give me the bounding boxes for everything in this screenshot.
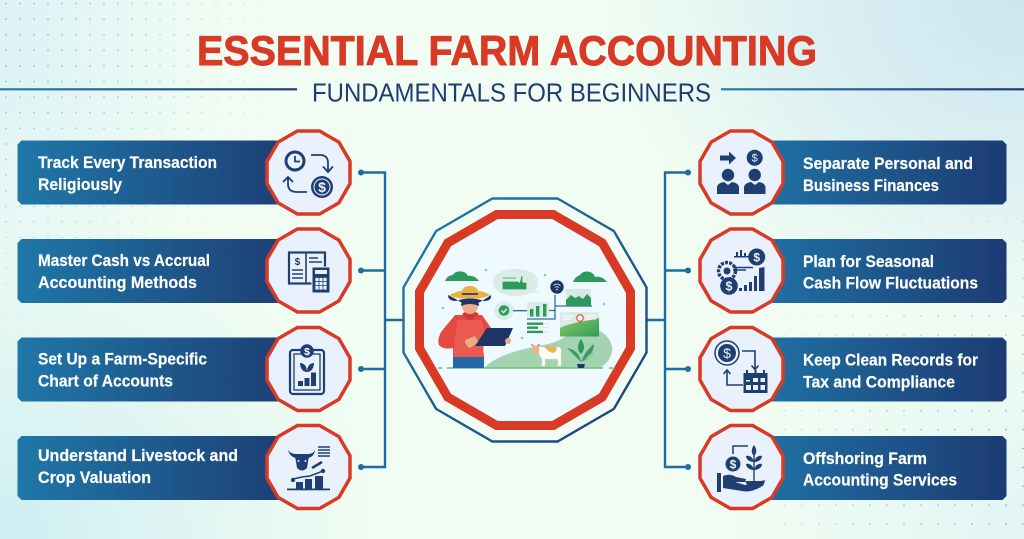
label: Crop Valuation <box>38 468 151 487</box>
label: Track Every Transaction <box>38 153 217 172</box>
ground line <box>438 367 613 369</box>
bar chart card <box>527 302 549 318</box>
data connectors <box>513 295 592 319</box>
label: Religiously <box>38 175 123 194</box>
right item 2 <box>700 229 1006 312</box>
clouds <box>445 271 479 281</box>
check badge <box>494 301 514 320</box>
icon: clipboard with plant <box>290 344 324 394</box>
area chart card <box>566 289 591 306</box>
bar <box>18 239 285 303</box>
badge <box>700 328 783 410</box>
icon: two people, arrow and dollar: $ <box>752 153 758 165</box>
icon: cash flow charts: $ <box>726 280 733 294</box>
badge <box>267 328 350 410</box>
left item 1 <box>18 131 350 214</box>
icon: hand holding plant and dollar: $ <box>730 458 737 472</box>
icon: cash flow charts: $ <box>753 250 760 264</box>
label: Cash Flow Fluctuations <box>803 274 978 292</box>
icon: ledger and calculator <box>289 252 330 293</box>
bar <box>760 436 1006 500</box>
left item 2 <box>18 229 350 312</box>
icon: clock and dollar cycle <box>283 150 333 198</box>
icon: ledger and calculator: $ <box>295 257 301 268</box>
label: Plan for Seasonal <box>803 252 934 271</box>
label: Keep Clean Records for <box>803 350 978 370</box>
title: ESSENTIAL FARM ACCOUNTING <box>197 27 817 74</box>
sparkle dots <box>442 269 605 339</box>
label: Set Up a Farm-Specific <box>38 350 207 368</box>
label: Master Cash vs Accrual <box>38 251 210 270</box>
badge <box>267 426 350 508</box>
map card <box>560 312 599 336</box>
label: Chart of Accounts <box>38 372 173 390</box>
list lines <box>527 322 543 333</box>
bar <box>18 140 285 204</box>
bar <box>760 338 1006 402</box>
label: Understand Livestock and <box>38 446 238 465</box>
icon: dollar to calendar cycle: $ <box>723 345 731 361</box>
badge <box>700 426 783 508</box>
bar <box>18 436 285 500</box>
icon: dollar to calendar cycle <box>715 341 768 393</box>
label: Accounting Services <box>803 470 957 490</box>
label: Offshoring Farm <box>803 449 927 468</box>
label: Separate Personal and <box>803 154 973 173</box>
left item 3 <box>18 328 350 410</box>
connector: right <box>646 170 691 470</box>
badge <box>700 229 783 312</box>
badge <box>267 131 350 214</box>
header rules <box>0 88 1024 90</box>
right item 1 <box>700 131 1006 214</box>
bar <box>18 338 285 402</box>
icon: hand holding plant and dollar <box>717 445 765 492</box>
icon: cattle and rising chart <box>287 447 330 490</box>
bar <box>760 239 1006 303</box>
icon: clipboard with plant: $ <box>304 346 310 358</box>
label: Business Finances <box>803 176 939 195</box>
right item 3 <box>700 328 1006 410</box>
wifi badge <box>550 280 564 294</box>
label: Tax and Compliance <box>803 372 955 392</box>
badge <box>267 229 350 312</box>
hill <box>484 328 612 368</box>
icon: clock and dollar cycle: $ <box>318 179 326 195</box>
right item 4 <box>700 426 1006 508</box>
label: Accounting Methods <box>38 273 197 292</box>
cow <box>539 347 561 366</box>
farmer <box>453 357 484 368</box>
speech bubble <box>493 269 540 296</box>
subtitle: FUNDAMENTALS FOR BEGINNERS <box>312 78 711 108</box>
connector: left <box>358 170 404 470</box>
icon: two people, arrow and dollar <box>717 150 766 194</box>
icon: cash flow charts <box>718 248 765 295</box>
plant <box>578 339 584 354</box>
badge <box>700 131 783 214</box>
left item 4 <box>18 426 350 508</box>
illustration: farmer with laptop on a farm <box>438 269 613 368</box>
central emblem <box>404 198 646 442</box>
bar <box>760 140 1006 204</box>
